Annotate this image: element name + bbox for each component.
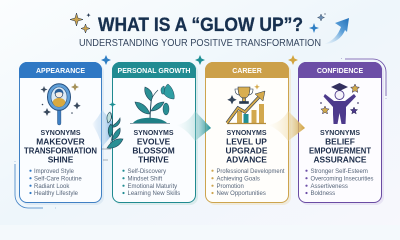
panel: personal growth: BLOSSOM (132, 146, 175, 156)
icon: stars (320, 84, 359, 114)
icon: mirror (48, 84, 70, 125)
panel: career: LEVEL UP (226, 136, 267, 146)
panel: career: UPGRADE (226, 146, 268, 156)
icon: blue sparkles right of title (309, 13, 326, 33)
panel: confidence: EMPOWERMENT (309, 146, 372, 156)
panel: personal growth: EVOLVE (137, 136, 171, 146)
panel: confidence (298, 62, 384, 205)
panel: career: SYNONYMS (226, 130, 267, 137)
list: growth: Self-Discovery (128, 169, 166, 175)
list: confidence: Assertiveness (310, 184, 348, 190)
header: personal growth (112, 62, 196, 78)
list: appearance: Improved Style (34, 169, 75, 175)
panel: confidence: CONFIDENCE (317, 68, 363, 75)
list: appearance: Healthy Lifestyle (34, 191, 79, 197)
icon: trophy (235, 87, 253, 104)
list: growth (122, 169, 180, 197)
panel: personal growth (109, 62, 198, 205)
panel: personal growth: THRIVE (138, 154, 169, 164)
panel: appearance: TRANSFORMATION (24, 146, 97, 156)
list: career: Professional Development (216, 169, 285, 175)
icon: bar chart with arrow (227, 91, 266, 124)
header: confidence (298, 62, 382, 78)
panel: appearance: SHINE (48, 154, 74, 164)
decorative purple bracket (342, 58, 386, 99)
header: career (205, 62, 289, 78)
list: confidence: Stronger Self-Esteem (310, 169, 368, 175)
list: appearance: Self-Care Routine (34, 176, 82, 182)
icon: plant (130, 87, 170, 124)
arrow: appearance to growth (92, 110, 118, 147)
panel: career (205, 62, 291, 205)
panel: appearance: APPEARANCE (36, 68, 85, 75)
icon: rising arrow (324, 18, 349, 44)
icon: side leaves (101, 112, 123, 160)
list: confidence: Boldness (310, 191, 335, 197)
list: career: New Opportunities (216, 191, 266, 197)
icon: gold sparkles left of title (70, 13, 91, 33)
list: career: Achieving Goals (216, 176, 260, 182)
panel: confidence: SYNONYMS (320, 130, 360, 137)
panel: appearance: SYNONYMS (40, 130, 81, 137)
icon: graduate figure (324, 83, 356, 124)
title: WHAT IS A “GLOW UP”? (98, 14, 303, 36)
subtitle: UNDERSTANDING YOUR POSITIVE TRANSFORMATION (79, 38, 321, 49)
list: growth: Emotional Maturity (128, 184, 177, 190)
header: appearance (19, 62, 102, 78)
icon: butterfly (161, 84, 174, 99)
list: appearance: Radiant Look (34, 184, 70, 190)
list: career (211, 169, 285, 197)
list: growth: Mindset Shift (128, 176, 163, 182)
decorative blue bracket (15, 161, 56, 208)
list: confidence: Overcoming Insecurities (310, 176, 374, 182)
list: confidence (305, 169, 374, 197)
panel: confidence: ASSURANCE (313, 154, 367, 164)
panel: personal growth: PERSONAL GROWTH (118, 68, 190, 75)
list: appearance (29, 169, 82, 197)
sparkle (109, 101, 116, 108)
panel: career: ADVANCE (226, 154, 267, 164)
list: growth: Learning New Skills (128, 191, 180, 197)
panel: career: CAREER (232, 68, 262, 75)
icon: career sparkles (227, 84, 260, 104)
panel: appearance: MAKEOVER (36, 136, 85, 146)
decorative sparkles above cards (101, 55, 298, 65)
icon: chrysalis (163, 103, 169, 115)
arrow: growth to career (176, 111, 211, 141)
list: career: Promotion (216, 184, 244, 190)
panel: personal growth: SYNONYMS (133, 130, 174, 137)
arrow: career to confidence (268, 111, 305, 141)
panel: confidence: BELIEF (325, 136, 355, 146)
panel: appearance (19, 62, 104, 205)
icon: mirror sparkles (40, 83, 81, 116)
